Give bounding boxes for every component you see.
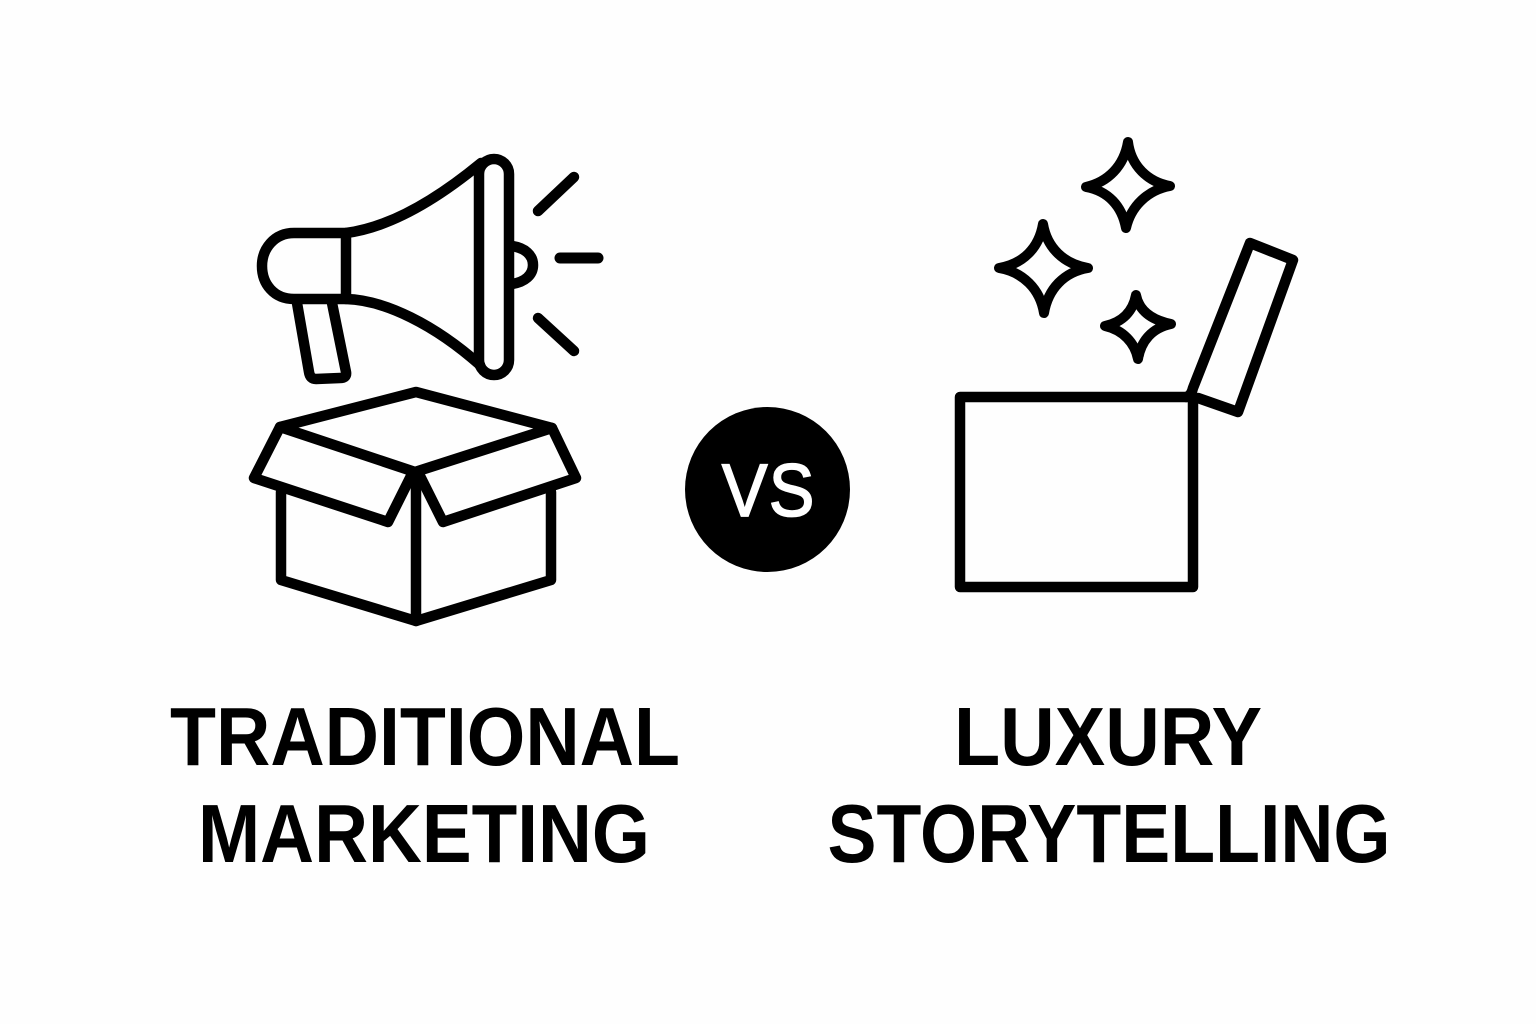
VS badge: VS (722, 450, 814, 533)
heading: traditional marketing: TRADITIONAL (170, 690, 680, 783)
icon: megaphone (262, 159, 598, 379)
heading: luxury storytelling: STORYTELLING (828, 787, 1390, 880)
heading: traditional marketing: MARKETING (198, 787, 650, 880)
icon: open box with lid (960, 243, 1293, 587)
icon: open cardboard box (254, 392, 576, 621)
icon: sparkles (999, 142, 1171, 359)
heading: luxury storytelling (828, 690, 1390, 880)
heading: luxury storytelling: LUXURY (954, 690, 1262, 783)
heading: traditional marketing (170, 690, 680, 880)
VS badge (685, 407, 850, 572)
